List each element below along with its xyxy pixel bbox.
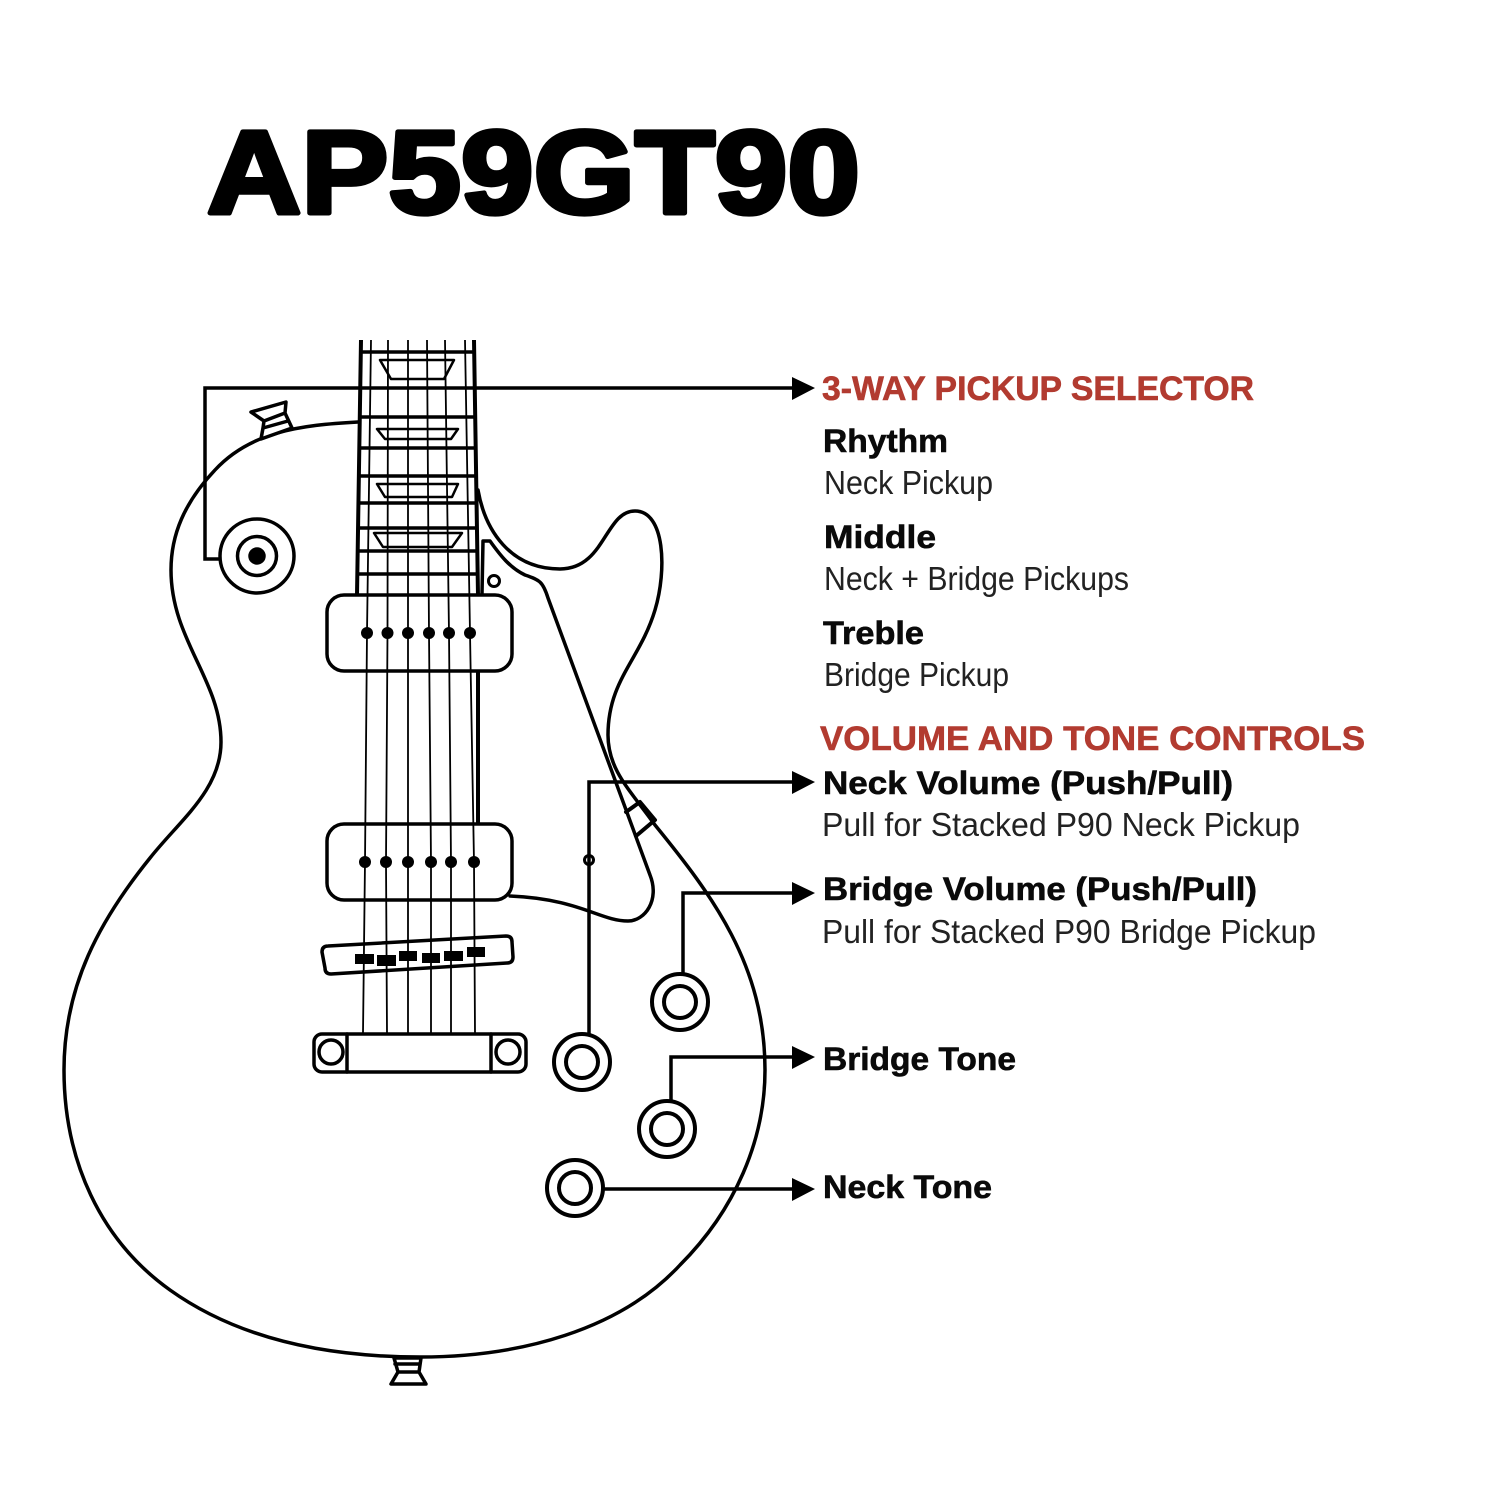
neck pickup poles — [361, 627, 476, 639]
leader: neck volume — [589, 782, 800, 1034]
tune-o-matic bridge — [322, 936, 513, 974]
bridge pickup — [327, 824, 512, 900]
toggle switch — [220, 519, 294, 593]
rhythm label: Rhythm — [823, 423, 948, 459]
pickguard bracket — [626, 802, 655, 836]
strap button top — [251, 402, 292, 439]
knob: bridge volume — [652, 974, 708, 1030]
neck tone label: Neck Tone — [823, 1169, 992, 1205]
treble description: Bridge Pickup — [824, 656, 1009, 693]
middle label: Middle — [824, 519, 936, 555]
neck pickup — [327, 595, 512, 671]
leader: neck tone — [604, 1187, 800, 1191]
arrow: selector — [792, 377, 815, 400]
knob: neck tone — [547, 1160, 603, 1216]
arrow: neck volume — [792, 771, 815, 794]
title: AP59GT90 — [207, 107, 860, 239]
arrow: neck tone — [792, 1178, 815, 1201]
leader: bridge tone — [671, 1057, 800, 1101]
leader: bridge volume — [683, 893, 800, 975]
bridge pickup poles — [359, 856, 480, 868]
strings — [363, 340, 475, 1033]
leader junction — [584, 856, 594, 864]
bridge saddles — [355, 947, 485, 966]
fretboard — [357, 340, 478, 825]
arrowheads — [792, 377, 815, 1201]
strap button bottom — [391, 1358, 426, 1384]
small screw — [488, 576, 500, 586]
fret inlays — [374, 360, 462, 547]
heading: volume and tone: VOLUME AND TONE CONTROLS — [820, 720, 1365, 758]
middle description: Neck + Bridge Pickups — [824, 560, 1129, 597]
tailpiece — [314, 1034, 526, 1072]
heading: pickup selector: 3-WAY PICKUP SELECTOR — [822, 370, 1254, 408]
bridge volume description: Pull for Stacked P90 Bridge Pickup — [822, 913, 1316, 950]
bridge tone label: Bridge Tone — [823, 1041, 1016, 1077]
bridge volume label: Bridge Volume (Push/Pull) — [823, 871, 1257, 907]
knob: bridge tone — [639, 1101, 695, 1157]
neck volume label: Neck Volume (Push/Pull) — [823, 765, 1233, 801]
pickguard — [482, 541, 653, 921]
arrow: bridge tone — [792, 1046, 815, 1069]
rhythm description: Neck Pickup — [824, 464, 993, 501]
leader: selector — [205, 388, 800, 559]
knob: neck volume — [554, 1034, 610, 1090]
treble label: Treble — [823, 615, 924, 651]
guitar illustration — [64, 340, 800, 1384]
guitar body outline — [64, 422, 765, 1357]
neck volume description: Pull for Stacked P90 Neck Pickup — [822, 806, 1300, 843]
arrow: bridge volume — [792, 882, 815, 905]
